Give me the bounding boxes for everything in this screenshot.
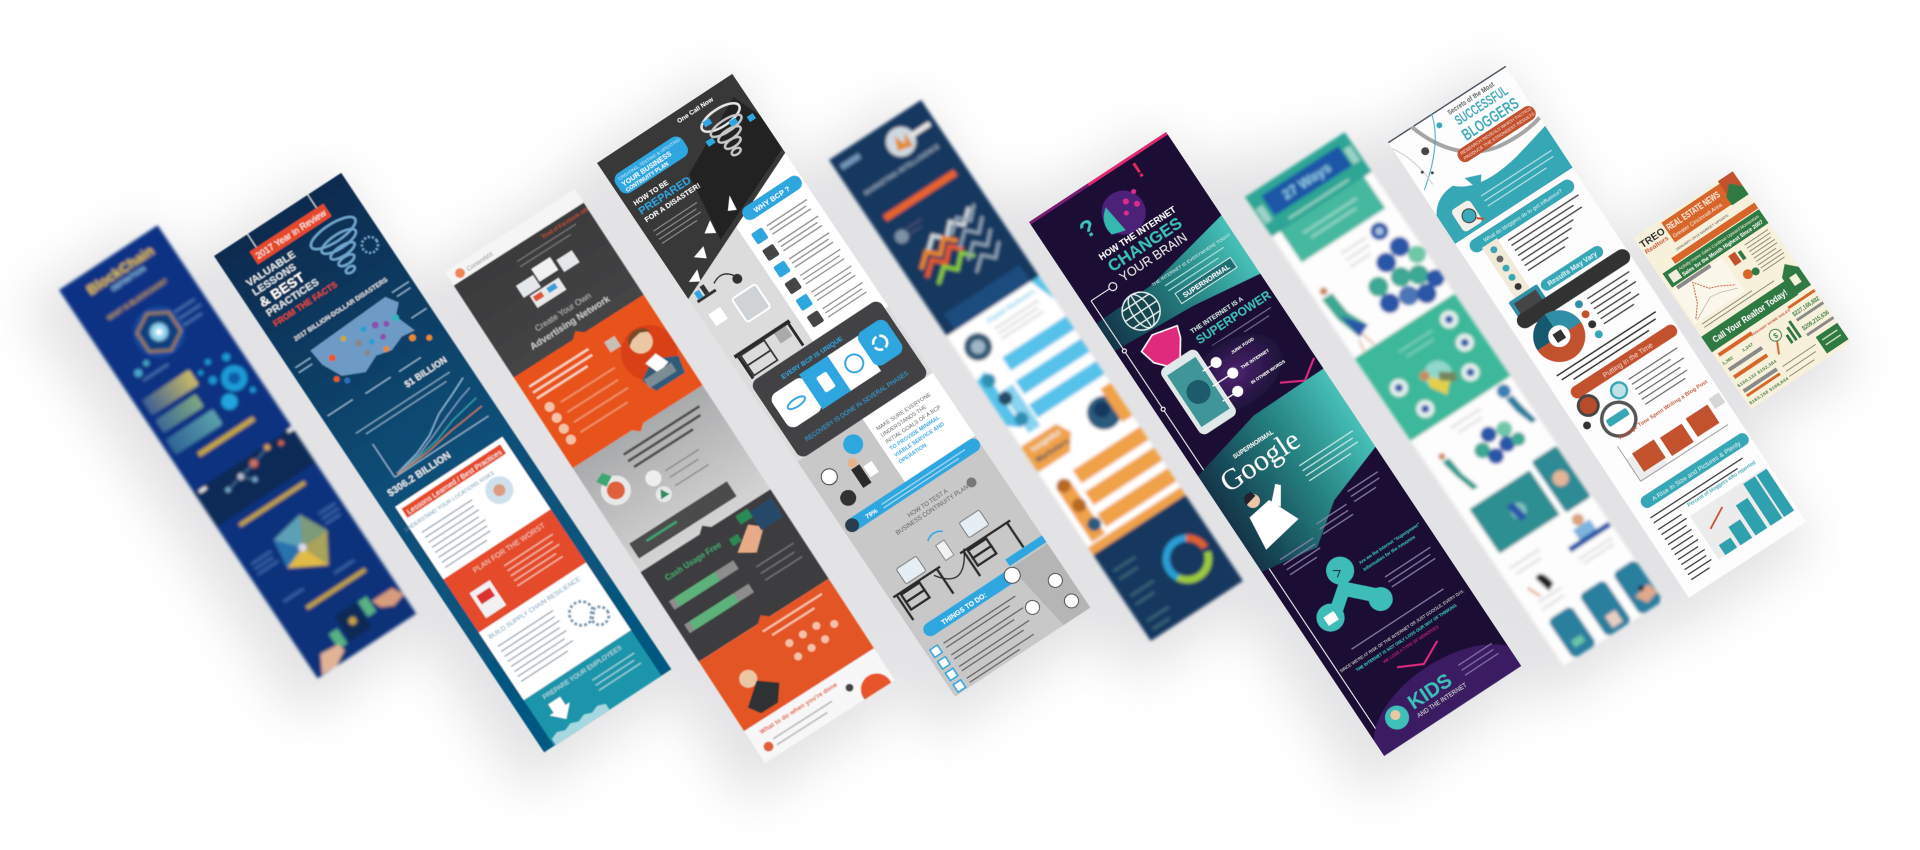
section: January home sales: JANUARY HOME SALES <box>1749 307 1791 337</box>
section: kids and the internet <box>1351 618 1557 800</box>
pill: results may vary <box>1538 244 1605 293</box>
band: green headline: Sales for the Month Highest Since 2007 <box>1681 220 1765 278</box>
text: benefit labels: IN OTHER WORDS <box>1250 359 1286 385</box>
section: insightful marketers <box>1018 382 1179 546</box>
stats left: $168,644 <box>1768 376 1790 393</box>
section: January home sales <box>1749 307 1808 361</box>
legend: donut <box>1528 268 1662 386</box>
heading: blockchain definition: BlockChain <box>84 242 157 298</box>
section: supernormal google <box>1186 369 1404 580</box>
panel: blockchain infographic <box>59 225 416 679</box>
checklist <box>930 594 1043 692</box>
text: report period: JANUARY 2014 MARKET UPDATE <box>1674 212 1730 252</box>
illustration: desks with computers <box>892 519 1027 622</box>
top dark stroke <box>1388 66 1506 143</box>
section: what do bloggers do <box>1467 177 1610 305</box>
callout: make sure everyone understands: INITIAL GOALS OF A BCP <box>884 404 943 445</box>
panel: business continuity plan <box>597 74 1090 697</box>
heading: successful bloggers <box>1447 76 1522 144</box>
callout: make sure everyone understands <box>863 373 975 482</box>
icon: tornado <box>308 214 380 276</box>
band: call your realtor today <box>1693 259 1812 352</box>
section: orange maintain <box>696 574 874 731</box>
text lines around map <box>294 280 428 418</box>
text and person lower <box>1504 502 1629 612</box>
pill: putting in the time: Putting in the Time <box>1602 342 1655 380</box>
cards: three phones <box>1545 559 1663 659</box>
callout: make sure everyone understands: OPERATION <box>898 443 928 465</box>
illustration: man with laptop <box>621 324 686 392</box>
icon: keyboard tablet <box>1508 284 1548 319</box>
pill: a rise in size and pictures: A Rise in Size and Pictures & Plenty <box>1651 440 1743 503</box>
text: call-out lines: SINCE WE'RE AT RISK OF THE INTERNET OR JUST GOOGLE, EVERY DAY, <box>1339 589 1465 674</box>
icon: brain with question and exclamation: ? <box>1075 214 1102 244</box>
section: prepare your employees: PREPARE YOUR EMPLOYEES <box>542 644 624 701</box>
section: kids and the internet: AND THE INTERNET <box>1416 682 1468 719</box>
text: teal question: Information for the Amazons <box>1362 534 1417 572</box>
section: grey questions <box>573 385 770 572</box>
chart: pentagon <box>272 512 332 572</box>
chart: ring diagram <box>1569 374 1648 452</box>
section: dark intro: Tired of Facebook ads <box>541 206 590 241</box>
chart: teal bar chart with arrow: Percent of bloggers who reported <box>1687 460 1757 509</box>
icons: question and tools circles <box>1001 546 1081 630</box>
callout: make sure everyone understands: UNDERSTANDS THE <box>880 404 928 439</box>
icon: hands exchanging with tablet <box>316 584 406 678</box>
stats left: 1,247 <box>1741 342 1755 354</box>
section: white footer: What to do when you're done <box>759 681 839 736</box>
section: plan for the worst: PLAN FOR THE WORST <box>471 521 547 575</box>
banner: real estate news: Greater Cincinnati Area <box>1672 202 1724 240</box>
icon: blue bubble cluster <box>196 350 258 412</box>
section: navy header with chart: MARKETING INTELLIGENCE <box>863 143 942 197</box>
band: every BCP is unique: RECOVERY IS DONE IN SEVERAL PHASES <box>804 371 910 443</box>
section: dark header <box>597 74 786 299</box>
heading: valuable lessons <box>244 250 338 328</box>
heading: successful bloggers: Secrets of the Most <box>1447 81 1496 117</box>
text: teal question: Are we the internet "Superpower" <box>1358 522 1421 565</box>
text lines <box>356 372 453 438</box>
header: white logo strip <box>454 252 494 278</box>
section: dark header: CREATING, TESTING & UPDATING <box>617 137 682 181</box>
panel: teal health infographic <box>1245 131 1665 666</box>
panel: create your own advertising network <box>445 189 903 775</box>
section: teal superhuman band: SUPERNORMAL <box>1182 263 1232 300</box>
section: teal superhuman band <box>1084 215 1260 364</box>
text lines <box>1328 547 1454 649</box>
banner: 2017 year in review: 2017 Year in Review <box>254 208 328 261</box>
white info column <box>736 153 888 342</box>
heading: how the internet changes your brain: HOW THE INTERNET <box>1097 204 1178 262</box>
section: what do bloggers do: What do bloggers do to get influence? <box>1483 189 1564 244</box>
heading: how to test: HOW TO TEST A <box>907 489 949 519</box>
section: navy header with chart <box>829 100 1039 336</box>
text: footer <box>1782 344 1823 376</box>
illustration: man with speech icons <box>809 430 889 511</box>
icon: globe <box>1115 285 1168 337</box>
section: dark header: YOUR BUSINESS <box>621 151 673 188</box>
text lines under chart <box>1702 277 1774 327</box>
section: January home sales: $ <box>1773 332 1780 340</box>
subheading: yellow strip 3 <box>306 568 366 610</box>
chart: line chart <box>1671 256 1745 324</box>
subheading: billion-dollar disasters: 2017 BILLION-DOLLAR DISASTERS <box>293 276 390 343</box>
section: digital marketers <box>947 276 1109 441</box>
heading: successful bloggers: SUCCESSFUL <box>1452 82 1511 129</box>
heading: how to test: BUSINESS CONTINUITY PLAN <box>895 484 970 537</box>
section: dark intro <box>454 202 644 378</box>
section: dark header: One Call Now <box>676 96 716 125</box>
section: green panel <box>1355 293 1511 441</box>
text: call-out lines: WE LOSE A TYPE OF MEMORIES <box>1382 624 1440 665</box>
pill: putting in the time <box>1568 322 1680 401</box>
section: insightful marketers: Marketers <box>1034 436 1071 465</box>
band: things to do ribbon <box>915 535 1090 691</box>
heading: valuable lessons: FROM THE FACTS <box>271 279 339 329</box>
stats left: $150,132 <box>1736 372 1758 389</box>
heading: how the internet changes your brain <box>1097 204 1195 288</box>
section: orange ad problems <box>511 290 706 473</box>
band: green headline: Activity Home Sales Continue Upward Momentum <box>1677 214 1760 271</box>
decorative vertical timeline <box>1087 281 1416 753</box>
heading: valuable lessons: & BEST <box>256 269 308 310</box>
banner: research reveals: RESEARCH REVEALS WHICH TACTICS <box>1459 106 1532 156</box>
panel: how the internet changes your brain <box>1024 126 1557 800</box>
cards: teal middle <box>1466 445 1591 555</box>
band: dark node network <box>194 427 316 527</box>
heading: how the internet changes your brain: YOUR BRAIN <box>1117 230 1190 285</box>
pill: dark question <box>1514 246 1633 331</box>
icon: green house <box>1716 171 1749 205</box>
section: dark header: PREPARED <box>637 174 694 218</box>
section: dark header: HOW TO BE <box>633 179 670 208</box>
section: white footer <box>744 648 892 752</box>
icons: computers and router <box>876 476 1004 586</box>
section: dark cash usage: Cash Usage Free <box>663 540 724 583</box>
chart: cost line chart <box>369 378 489 477</box>
heading: why have a BCP: WHY BCP ? <box>752 184 792 214</box>
heading: valuable lessons: LESSONS <box>250 261 299 299</box>
section: dark header: FOR A DISASTER! <box>643 181 702 224</box>
panel: marketing intelligence <box>829 100 1243 641</box>
subheading: yellow strip 2 <box>239 481 306 527</box>
stats left <box>1716 329 1790 406</box>
pill: a rise in size and pictures <box>1638 431 1751 510</box>
section: teal superhuman band: THE INTERNET IS EVERYWHERE TODAY <box>1151 232 1233 288</box>
chevron 2 <box>1397 641 1444 677</box>
section: dark intro: Create Your Own <box>533 290 593 333</box>
icon: tornado with papers <box>697 98 761 163</box>
section: digital marketers: Digital Marketers <box>986 288 1037 325</box>
heading: valuable lessons: VALUABLE <box>244 249 298 289</box>
stats right <box>1787 289 1834 336</box>
logo: TREO Realtors: Realtors <box>1644 235 1671 256</box>
section: navy footer with donut chart <box>1088 487 1243 641</box>
icon: brain with question and exclamation <box>1063 158 1169 256</box>
section: insightful marketers: Insightful <box>1029 428 1062 454</box>
chevron <box>1279 358 1322 393</box>
header: white logo strip: ContentMX <box>466 252 495 273</box>
section: lessons learned: UNDERSTAND YOUR LOCATIONS RISKS <box>404 471 496 534</box>
stats left: $163,158 <box>1748 389 1770 406</box>
panel: valuable lessons and best practices <box>214 173 671 752</box>
bars: three gradient blocks <box>140 370 224 455</box>
callout: make sure everyone understands: VIABLE SERVICE AND <box>893 421 946 459</box>
section: supernormal google: SUPERNORMAL <box>1233 430 1275 461</box>
section: dark cash usage <box>637 484 829 662</box>
subheading: what is blockchain: WHAT IS BLOCKCHAIN? <box>107 278 169 322</box>
chart: donut <box>1523 300 1595 372</box>
stats right: $209,215,636 <box>1802 310 1831 332</box>
panel: TREO real estate news <box>1633 171 1851 409</box>
soft drop shadow behind all panels <box>45 84 1837 781</box>
icon: hexagon network <box>132 296 204 384</box>
box: green contact <box>1816 323 1849 354</box>
stat: 306.2 billion: $306.2 BILLION <box>386 450 453 499</box>
illustration: desk with tablet and lamp <box>691 256 805 380</box>
band: blue stat ribbon <box>842 436 983 535</box>
band: call your realtor today: Call Your Realtor Today! <box>1711 287 1789 345</box>
text lines <box>1629 348 1694 404</box>
section: teal intro shape <box>1428 126 1573 244</box>
heading: superpower: SUPERPOWER <box>1193 288 1274 347</box>
stats right: $227,166,882 <box>1792 296 1822 318</box>
section: kids and the internet: KIDS <box>1404 670 1456 714</box>
text blocks left <box>1650 458 1783 580</box>
chart: red squares bars: Average Time Spent Writing a Blog Post <box>1618 379 1709 441</box>
panel: secrets of the most successful bloggers <box>1388 66 1806 598</box>
chart: hexagon cluster bottom with figures <box>1423 379 1550 496</box>
icons and text: right column <box>1728 229 1786 282</box>
text lines on dark <box>1269 472 1399 575</box>
banner: real estate news: REAL ESTATE NEWS <box>1665 190 1722 232</box>
stat: 1 billion: $1 BILLION <box>403 355 449 390</box>
chart: teal bar chart with arrow <box>1683 457 1794 559</box>
text: benefit labels: THE INTERNET <box>1240 348 1270 370</box>
band: every BCP is unique: EVERY BCP IS UNIQUE <box>780 335 845 381</box>
section: dark intro: Advertising Network <box>528 293 613 353</box>
icon: brain with question and exclamation: ! <box>1128 158 1148 182</box>
text lines <box>1341 237 1376 267</box>
section: lessons learned <box>391 437 551 583</box>
subheading: yellow strip <box>197 416 255 457</box>
chart: hexagon cluster top <box>1339 208 1453 327</box>
text: benefit labels <box>1230 329 1286 385</box>
graphic: teal trefoil circles <box>1292 542 1397 645</box>
band: blue stat ribbon: 79% <box>864 507 879 521</box>
stats left: $152,384 <box>1756 359 1778 376</box>
heading: why have a BCP <box>740 173 805 223</box>
band: green headline <box>1662 209 1769 288</box>
text: call-out lines: THE INTERNET IS NOT ONLY LOSS OUR WAY OF THINKING <box>1355 603 1458 673</box>
icon list with text lines <box>751 198 869 328</box>
heading: superpower: THE INTERNET IS A <box>1189 296 1245 335</box>
graphic: grey curves with dots <box>1388 66 1542 197</box>
band: things to do ribbon: THINGS TO DO: <box>941 592 989 627</box>
section: lessons learned: Lessons Learned / Best Practices <box>405 448 504 516</box>
logo: TREO Realtors: TREO <box>1638 226 1668 251</box>
strip: orange labels <box>1671 203 1758 264</box>
chart: red squares bars <box>1613 377 1736 481</box>
section: build supply chain resilience <box>479 563 631 701</box>
illustration: doctor <box>1234 476 1306 550</box>
section: supernormal google: Google <box>1214 423 1306 499</box>
icon: superman shield <box>1137 321 1198 382</box>
heading: blockchain definition: DEFINITION <box>110 266 147 293</box>
text: benefit labels: JUNK FOOD <box>1230 336 1256 355</box>
section: dark header: CONTINUITY PLAN <box>625 161 670 194</box>
band: every BCP is unique <box>750 299 929 460</box>
illustration: smartphone with brain <box>1159 307 1301 438</box>
text lines <box>249 500 356 604</box>
heading: successful bloggers: BLOGGERS <box>1458 94 1522 144</box>
heading: how the internet changes your brain: CHANGES <box>1104 213 1186 276</box>
banner: real estate news <box>1661 184 1733 242</box>
header: teal with blue banner: 27 Ways <box>1279 159 1334 203</box>
section: plan for the worst <box>443 509 587 633</box>
pill: results may vary: Results May Vary <box>1547 251 1599 288</box>
callout: make sure everyone understands: TO PROVIDE MINIMAL <box>889 414 942 452</box>
map: United States with markers <box>310 296 434 384</box>
header: teal with blue banner <box>1245 132 1393 268</box>
illustration: woman standing <box>1316 278 1379 354</box>
section: prepare your employees <box>524 630 661 746</box>
callout: make sure everyone understands: MAKE SURE EVERYONE <box>875 392 933 432</box>
stats left: 1,382 <box>1721 355 1735 367</box>
heading: valuable lessons: PRACTICES <box>264 276 321 319</box>
banner: research reveals: PRODUCE THE STRONGEST RESULTS <box>1463 111 1536 161</box>
section: build supply chain resilience: BUILD SUPPLY CHAIN RESILIENCE <box>488 576 583 641</box>
icon: magnifier over white card <box>1450 198 1485 233</box>
banner: 2017 year in review <box>241 190 332 264</box>
top stripe <box>1029 132 1168 224</box>
